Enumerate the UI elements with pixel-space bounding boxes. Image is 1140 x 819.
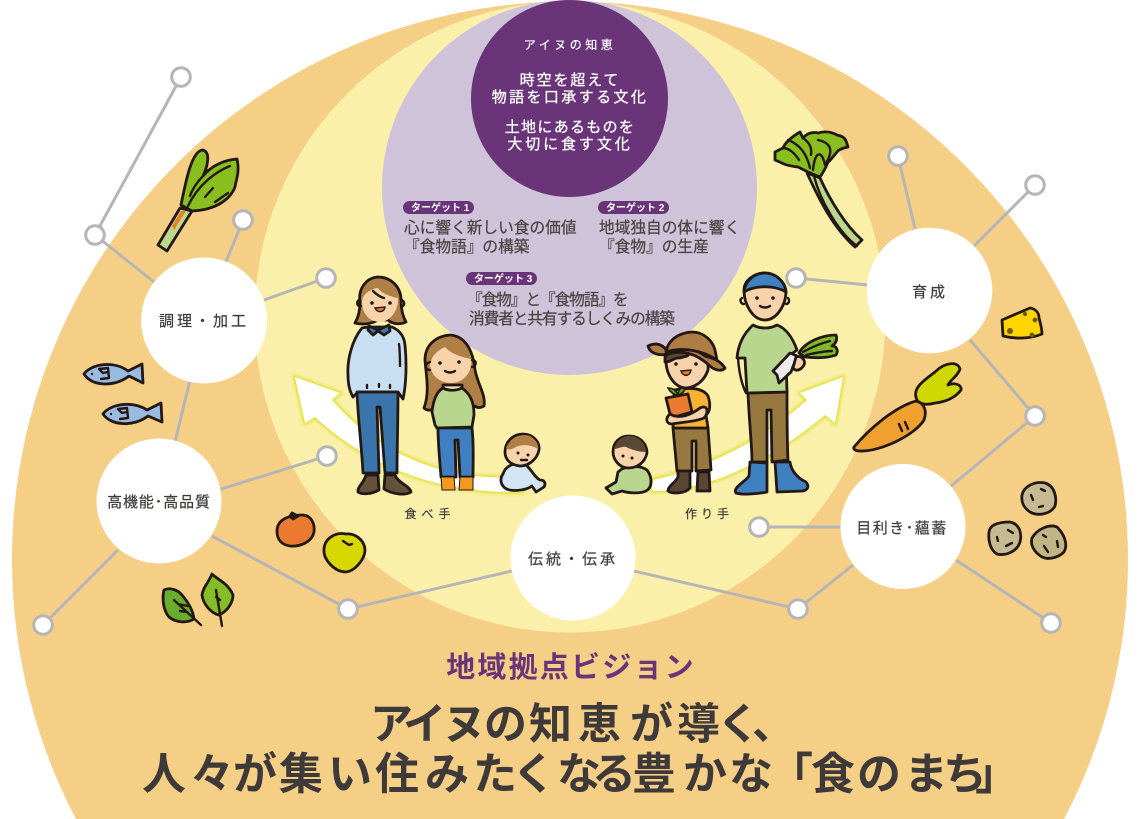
connector end dots (34, 68, 1060, 634)
person: girl (424, 335, 484, 490)
node: cultivation: 育成 (912, 284, 948, 301)
node: tradition: 伝統・伝承 (528, 551, 618, 568)
target 1 (403, 201, 577, 256)
main title (142, 701, 1019, 799)
icon: fish upper (84, 364, 143, 384)
person: mother (348, 277, 411, 494)
target 2 (598, 201, 740, 256)
person: boy with hat (648, 332, 725, 493)
node: discernment and storage (840, 464, 966, 589)
person: baby with blue outfit (501, 434, 545, 492)
icon: apple (324, 534, 365, 572)
target 1: 『食物語』の構築 (404, 238, 530, 256)
target 3 (466, 272, 675, 328)
target 3: 消費者と共有するしくみの構築 (469, 310, 675, 328)
icon: persimmon (277, 513, 314, 546)
target 3: 『食物』と『食物語』を (467, 291, 627, 309)
node: high function and quality (96, 438, 222, 564)
icon: carrot (854, 364, 961, 451)
main title: 人々が集い住みたくなる豊かな「食のまち」 (142, 750, 1019, 799)
purple circle: Ainu wisdom (471, 0, 668, 197)
node: cooking and processing: 調理・加工 (159, 313, 249, 330)
person: father with vegetable (735, 273, 837, 494)
icon: herb leaves (163, 574, 233, 626)
icon: cheese (1002, 308, 1042, 338)
target 1: 心に響く新しい食の価値 (404, 219, 577, 237)
subtitle: 地域拠点ビジョン (446, 651, 696, 684)
purple circle: Ainu wisdom: 物語を口承する文化 (492, 89, 648, 106)
target 3: ターゲット 3 (474, 272, 533, 285)
label: producers: 作り手 (685, 507, 733, 521)
node: tradition (510, 496, 636, 620)
person: baby with green outfit (606, 436, 651, 494)
connector network (43, 77, 1051, 625)
node: high function and quality: 高機能･高品質 (107, 493, 211, 511)
target 2: 『食物』の生産 (599, 238, 709, 256)
node: cooking and processing (141, 258, 267, 384)
icon: leafy green right (775, 132, 862, 247)
lavender circle (382, 0, 757, 375)
purple circle: Ainu wisdom: 時空を超えて (520, 72, 620, 89)
icon: potatoes (989, 483, 1066, 558)
arrow: producers (652, 377, 843, 491)
main title: アイヌの知恵が導く、 (370, 701, 795, 749)
target 1: ターゲット 1 (411, 201, 470, 214)
target 2: ターゲット 2 (606, 201, 665, 214)
icon: fish lower (103, 403, 162, 424)
purple circle: Ainu wisdom: 大切に食す文化 (507, 136, 633, 153)
target 2: 地域独自の体に響く (599, 219, 740, 237)
node: cultivation (867, 228, 992, 353)
purple circle: Ainu wisdom: アイヌの知恵 (524, 38, 616, 52)
label: eaters: 食べ手 (404, 507, 456, 521)
yellow circle (254, 2, 886, 632)
node: discernment and storage: 目利き･蘊蓄 (856, 520, 948, 537)
arrow: eaters (295, 377, 523, 492)
icon: leafy green left (158, 150, 238, 251)
purple circle: Ainu wisdom: 土地にあるものを (505, 119, 635, 136)
